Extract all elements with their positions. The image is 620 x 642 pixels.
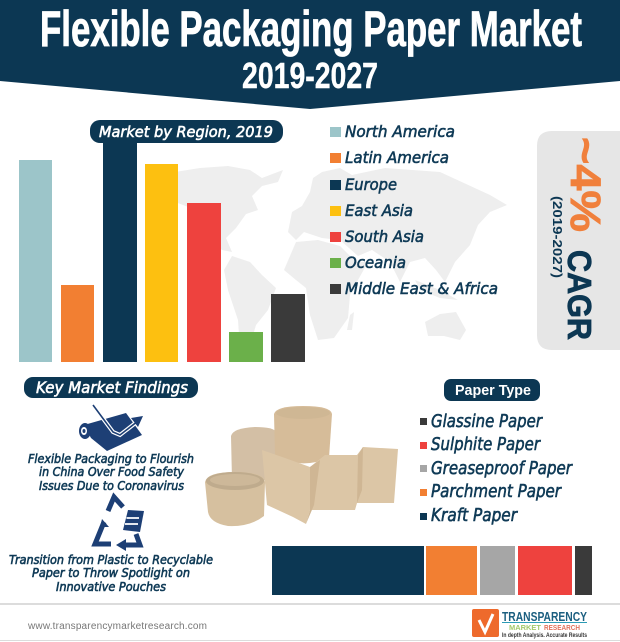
stacked bar: paper type share	[272, 546, 592, 595]
finding text 2	[9, 553, 213, 594]
panel: CAGR	[537, 131, 620, 350]
CAGR label: CAGR	[561, 250, 598, 340]
legend: paper types: Parchment Paper	[431, 482, 563, 502]
legend: paper types: Sulphite Paper	[431, 435, 542, 455]
legend: regions: South Asia	[345, 227, 424, 246]
logo: In depth Analysis. Accurate Results	[502, 633, 588, 639]
legend: regions: East Asia	[345, 201, 413, 220]
legend: regions: Middle East & Africa	[345, 279, 498, 298]
legend: paper types	[420, 412, 574, 526]
finding text 2: Paper to Throw Spotlight on	[32, 566, 190, 580]
legend: paper types: Kraft Paper	[431, 506, 519, 526]
icon: recycle triangle with paper	[95, 497, 144, 551]
finding text 2: Innovative Pouches	[56, 580, 166, 594]
legend: regions: Oceania	[345, 253, 406, 272]
CAGR period: (2019-2027)	[550, 196, 565, 278]
footer	[0, 603, 620, 641]
finding text 1: Flexible Packaging to Flourish	[28, 452, 194, 466]
finding text 1: in China Over Food Safety	[39, 465, 185, 479]
pill: key market findings: Key Market Findings	[36, 378, 188, 397]
bar chart: market by region	[19, 143, 305, 362]
legend: paper types: Greaseproof Paper	[431, 459, 574, 479]
subtitle years: 2019-2027	[242, 55, 378, 96]
logo: TRANSPARENCY	[502, 609, 587, 624]
image: kraft paper rolls	[205, 406, 398, 526]
legend: regions: North America	[345, 122, 455, 141]
finding text 1: Issues Due to Coronavirus	[39, 479, 184, 493]
CAGR value: ~4%	[561, 137, 609, 232]
website url: www.transparencymarketresearch.com	[27, 621, 207, 632]
legend: paper types: Glassine Paper	[431, 412, 544, 432]
icon: paper roll with growth arrow	[79, 405, 143, 451]
finding text 1	[28, 452, 194, 493]
world map background	[150, 166, 507, 352]
legend: regions: Latin America	[345, 148, 449, 167]
logo	[472, 609, 588, 639]
finding text 2: Transition from Plastic to Recyclable	[9, 553, 213, 567]
pill: market by region: Market by Region, 2019	[99, 123, 273, 141]
pill: paper type: Paper Type	[455, 382, 531, 399]
logo: RESEARCH	[544, 623, 580, 632]
legend: regions: Europe	[345, 175, 397, 194]
header banner	[0, 0, 620, 109]
legend: regions	[330, 122, 498, 298]
pill: paper type	[444, 379, 540, 401]
logo: MARKET	[509, 623, 541, 632]
